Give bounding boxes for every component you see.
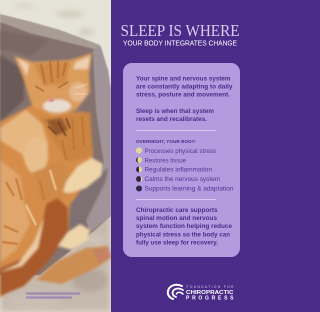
icon: full moon (136, 148, 142, 154)
photo credit smudge (wording illegible in the reference) (26, 292, 80, 298)
logo: Foundation for Chiropractic Progress: FOUNDATION FOR (186, 285, 234, 289)
title: SLEEP IS WHERE (120, 21, 240, 40)
icon: gibbous moon (136, 157, 142, 163)
title: YOUR BODY INTEGRATES CHANGE (123, 38, 237, 47)
cat details (2, 60, 88, 244)
list: overnight benefits with moon phases: Processes physical stress (144, 148, 216, 155)
bed (0, 14, 111, 275)
list: overnight benefits with moon phases: Regulates inflammation (144, 167, 212, 174)
panel: content card (123, 63, 240, 257)
list: overnight benefits with moon phases: Restores tissue (144, 157, 187, 164)
text block: intro: are constantly adapting to daily (136, 84, 233, 90)
icon: half moon (136, 166, 142, 172)
body (0, 106, 93, 298)
title (120, 21, 240, 47)
text block: chiropractic care: system function helping reduce (136, 223, 233, 230)
hind leg (0, 198, 68, 296)
icon: crescent moon (136, 176, 142, 182)
flank (0, 160, 30, 262)
text block: chiropractic care: Chiropractic care supports (136, 207, 218, 214)
chest and arm (40, 112, 93, 162)
text block: chiropractic care (136, 207, 233, 246)
icon: new moon (136, 186, 142, 192)
text block: intro: Your spine and nervous system (136, 76, 231, 82)
paws (63, 158, 103, 193)
text block: overnight heading: OVERNIGHT, YOUR BODY: (136, 139, 196, 144)
list: overnight benefits with moon phases: Supports learning & adaptation (144, 186, 234, 193)
cat (0, 53, 111, 298)
text block: chiropractic care: spinal motion and nervous (136, 215, 218, 222)
text block: intro: Sleep is when that system (136, 108, 215, 115)
list: overnight benefits with moon phases (136, 148, 234, 193)
photo: sleeping ginger cat in a pet bed (0, 0, 111, 312)
list: overnight benefits with moon phases: Calms the nervous system (144, 176, 220, 183)
logo: Foundation for Chiropractic Progress: PROGRESS (186, 296, 234, 302)
text block: intro (136, 76, 233, 123)
logo: Foundation for Chiropractic Progress: CHIROPRACTIC (186, 290, 234, 296)
text block: chiropractic care: fully use sleep for recovery. (136, 239, 218, 246)
logo: Foundation for Chiropractic Progress (168, 285, 234, 302)
infographic (0, 0, 240, 312)
background (0, 0, 250, 312)
icon: nose (48, 98, 54, 102)
text block: intro: resets and recalibrates. (136, 116, 207, 123)
text block: chiropractic care: physical stress so the body can (136, 231, 230, 238)
icon: logo swirl (168, 285, 183, 299)
rug texture (0, 4, 111, 312)
head (14, 53, 92, 116)
text block: intro: stress, posture and movement. (136, 92, 230, 98)
